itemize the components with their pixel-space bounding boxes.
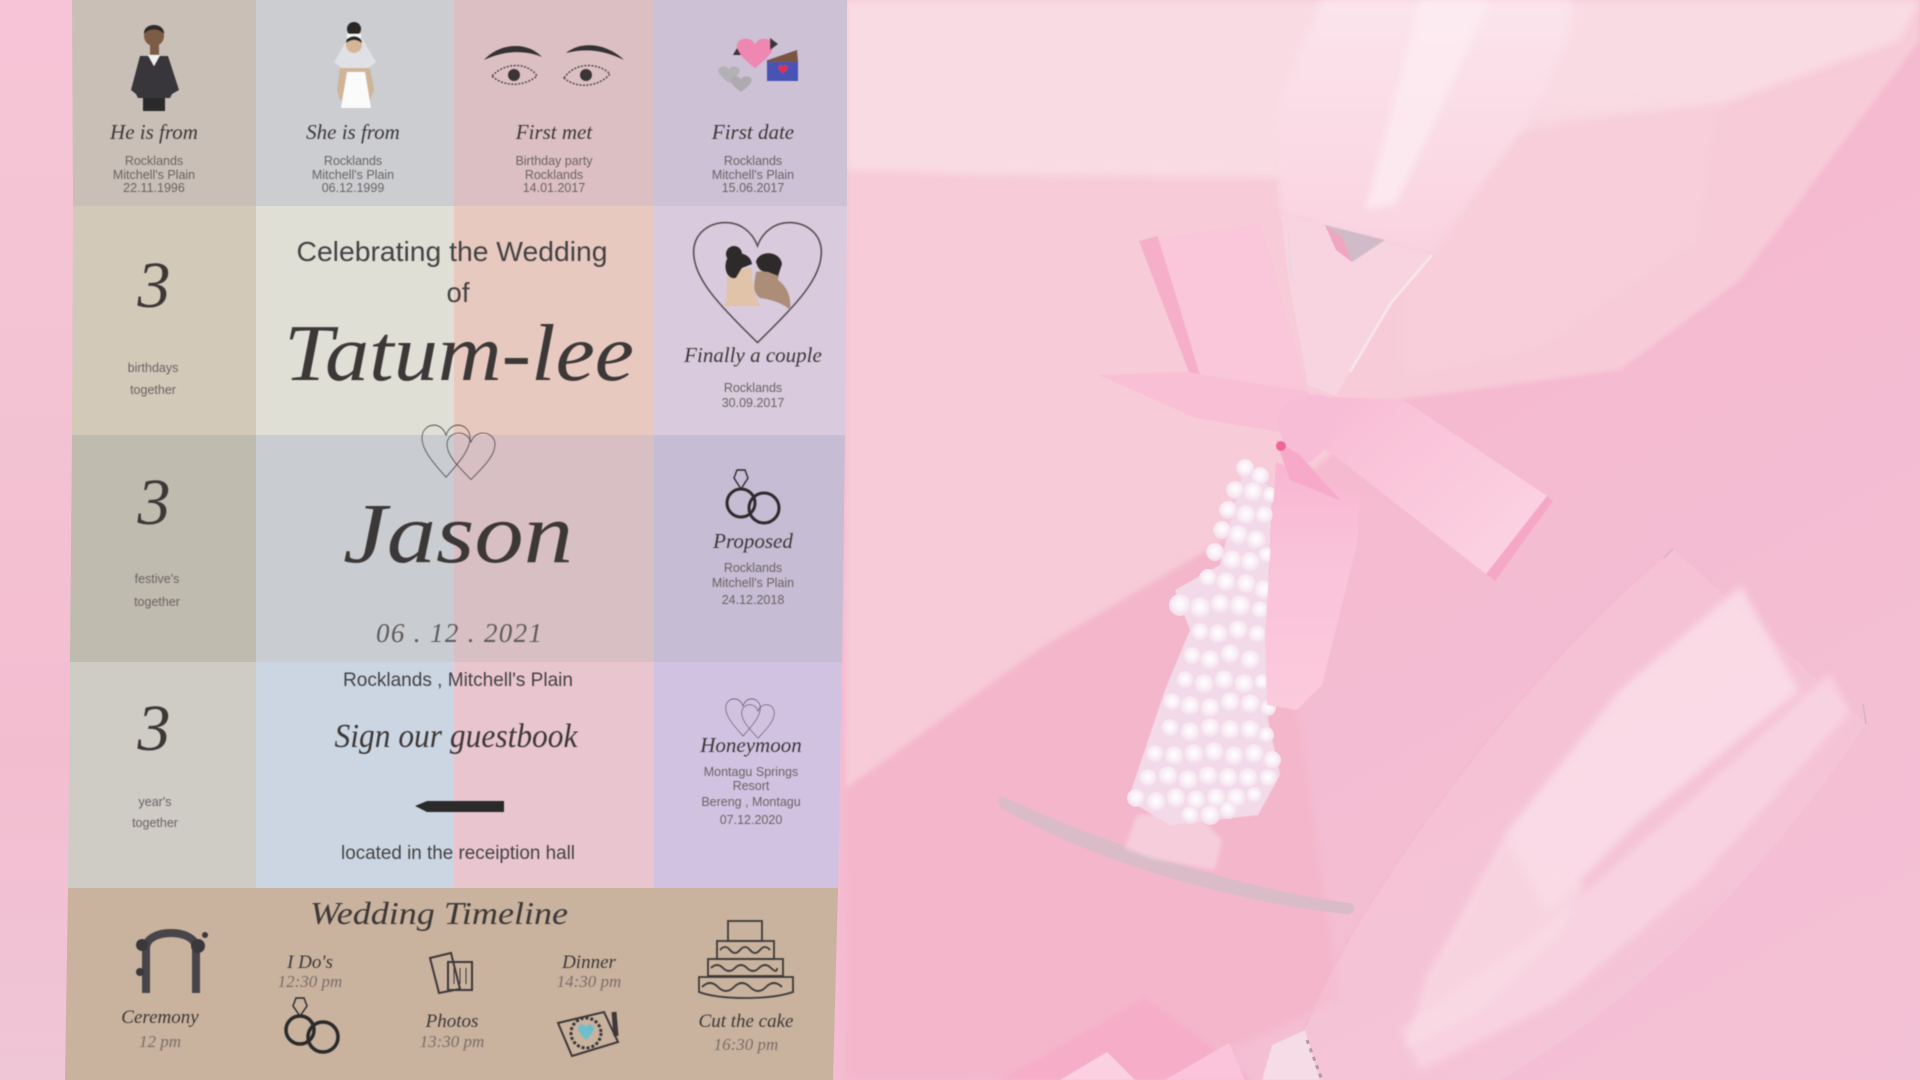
icon: dinner plate — [558, 1012, 618, 1056]
upper champagne glass — [1274, 0, 1572, 396]
panel: years counter: together — [132, 816, 178, 830]
timeline item: cut the cake: Cut the cake — [699, 1011, 793, 1032]
title: celebrating the wedding: of — [447, 277, 470, 308]
timeline item: ceremony: 12 pm — [139, 1032, 181, 1051]
panel: birthdays counter: together — [130, 383, 176, 397]
panel: first date: Mitchell's Plain — [712, 168, 794, 182]
panel: first date: 15.06.2017 — [722, 181, 784, 195]
panel: first met: Rocklands — [525, 168, 583, 182]
panel: she is from: She is from — [306, 120, 400, 144]
heading: sign our guestbook: Sign our guestbook — [334, 718, 578, 755]
panel: honeymoon: Montagu Springs — [704, 765, 798, 779]
heading: Jason: Jason — [343, 485, 573, 581]
panel: festive's counter — [134, 466, 180, 609]
panel: he is from: Mitchell's Plain — [113, 168, 195, 182]
icon: ceremony arch — [136, 932, 208, 993]
panel: first date: Rocklands — [724, 154, 782, 168]
panel: birthdays counter — [128, 249, 178, 397]
panel: first date: First date — [711, 120, 794, 144]
panel: first met: 14.01.2017 — [523, 181, 585, 195]
wedding infographic panel — [65, 0, 847, 1080]
timeline item: cut the cake — [699, 1011, 793, 1054]
heading: Tatum-lee: Tatum-lee — [284, 310, 634, 398]
icon: photos — [430, 953, 472, 993]
timeline item: photos — [420, 1011, 484, 1051]
panel: honeymoon: Resort — [733, 779, 770, 793]
timeline item: I Do's — [278, 952, 342, 991]
panel: festive's counter: festive's — [135, 572, 179, 586]
timeline item: dinner: Dinner — [561, 952, 617, 973]
timeline item: dinner: 14:30 pm — [557, 972, 621, 991]
panel: first date — [711, 38, 798, 195]
panel: she is from: Rocklands — [324, 154, 382, 168]
panel: birthdays counter: 3 — [136, 249, 170, 322]
timeline item: cut the cake: 16:30 pm — [714, 1035, 778, 1054]
icon: first date heart, chocolate and masks — [718, 38, 798, 92]
panel: honeymoon: 07.12.2020 — [720, 813, 782, 827]
icon: groom — [131, 25, 179, 111]
panel: finally a couple: Finally a couple — [683, 343, 822, 367]
timeline item: I Do's: 12:30 pm — [278, 972, 342, 991]
icon: engagement rings — [727, 470, 779, 523]
icon: wedding rings — [286, 998, 338, 1052]
pearl strand — [1127, 459, 1281, 825]
panel: honeymoon — [699, 699, 802, 827]
icon: eyes — [484, 45, 624, 85]
panel: years counter: year's — [139, 795, 171, 809]
panel: he is from: He is from — [109, 120, 198, 144]
panel: honeymoon: Bereng , Montagu — [701, 795, 801, 809]
panel: finally a couple: Rocklands — [724, 381, 782, 395]
panel: finally a couple: 30.09.2017 — [722, 396, 784, 410]
timeline item: photos: 13:30 pm — [420, 1032, 484, 1051]
panel: first met — [484, 45, 624, 195]
panel: festive's counter: 3 — [136, 466, 170, 539]
wedding date: 06 . 12 . 2021 — [376, 618, 542, 648]
panel: proposed — [712, 470, 794, 607]
timeline item: dinner — [557, 952, 621, 991]
icon: pen — [415, 801, 504, 812]
panel: proposed: 24.12.2018 — [722, 593, 784, 607]
panel: finally a couple — [683, 223, 822, 410]
pink ribbon bow — [1099, 224, 1553, 710]
panel: she is from — [306, 22, 400, 195]
panel: festive's counter: together — [134, 595, 180, 609]
panel grid: coloured cells — [65, 0, 847, 1080]
panel: birthdays counter: birthdays — [128, 361, 178, 375]
heading: wedding timeline: Wedding Timeline — [310, 895, 568, 931]
panel: years counter: 3 — [136, 692, 170, 765]
glass base and stem foot — [998, 797, 1355, 914]
panel: wedding timeline — [121, 895, 793, 1056]
title: celebrating the wedding — [296, 236, 608, 308]
panel: he is from: Rocklands — [125, 154, 183, 168]
panel: he is from: 22.11.1996 — [123, 181, 185, 195]
icon: couple in heart — [694, 223, 821, 343]
timeline item: I Do's: I Do's — [286, 952, 333, 973]
panel: she is from: 06.12.1999 — [322, 181, 384, 195]
panel: proposed: Mitchell's Plain — [712, 576, 794, 590]
panel: first met: First met — [515, 120, 593, 144]
panel: years counter — [132, 692, 178, 830]
timeline item: ceremony — [121, 1007, 199, 1051]
panel: honeymoon: Honeymoon — [699, 733, 802, 757]
panel: proposed: Rocklands — [724, 561, 782, 575]
panel: she is from: Mitchell's Plain — [312, 168, 394, 182]
guestbook location note: located in the receiption hall — [341, 842, 575, 864]
icon: bride — [334, 22, 376, 108]
timeline item: ceremony: Ceremony — [121, 1007, 199, 1028]
lower champagne glass — [1000, 549, 1866, 1080]
title: celebrating the wedding: Celebrating the Wedding — [296, 236, 608, 267]
icon: small entwined hearts — [726, 699, 774, 738]
icon: wedding cake — [699, 921, 793, 998]
panel: first met: Birthday party — [515, 154, 593, 168]
venue: Rocklands , Mitchell's Plain — [343, 669, 573, 691]
panel: he is from — [109, 25, 198, 195]
icon: entwined hearts — [422, 425, 495, 480]
panel: proposed: Proposed — [712, 529, 793, 553]
timeline item: photos: Photos — [425, 1011, 478, 1032]
